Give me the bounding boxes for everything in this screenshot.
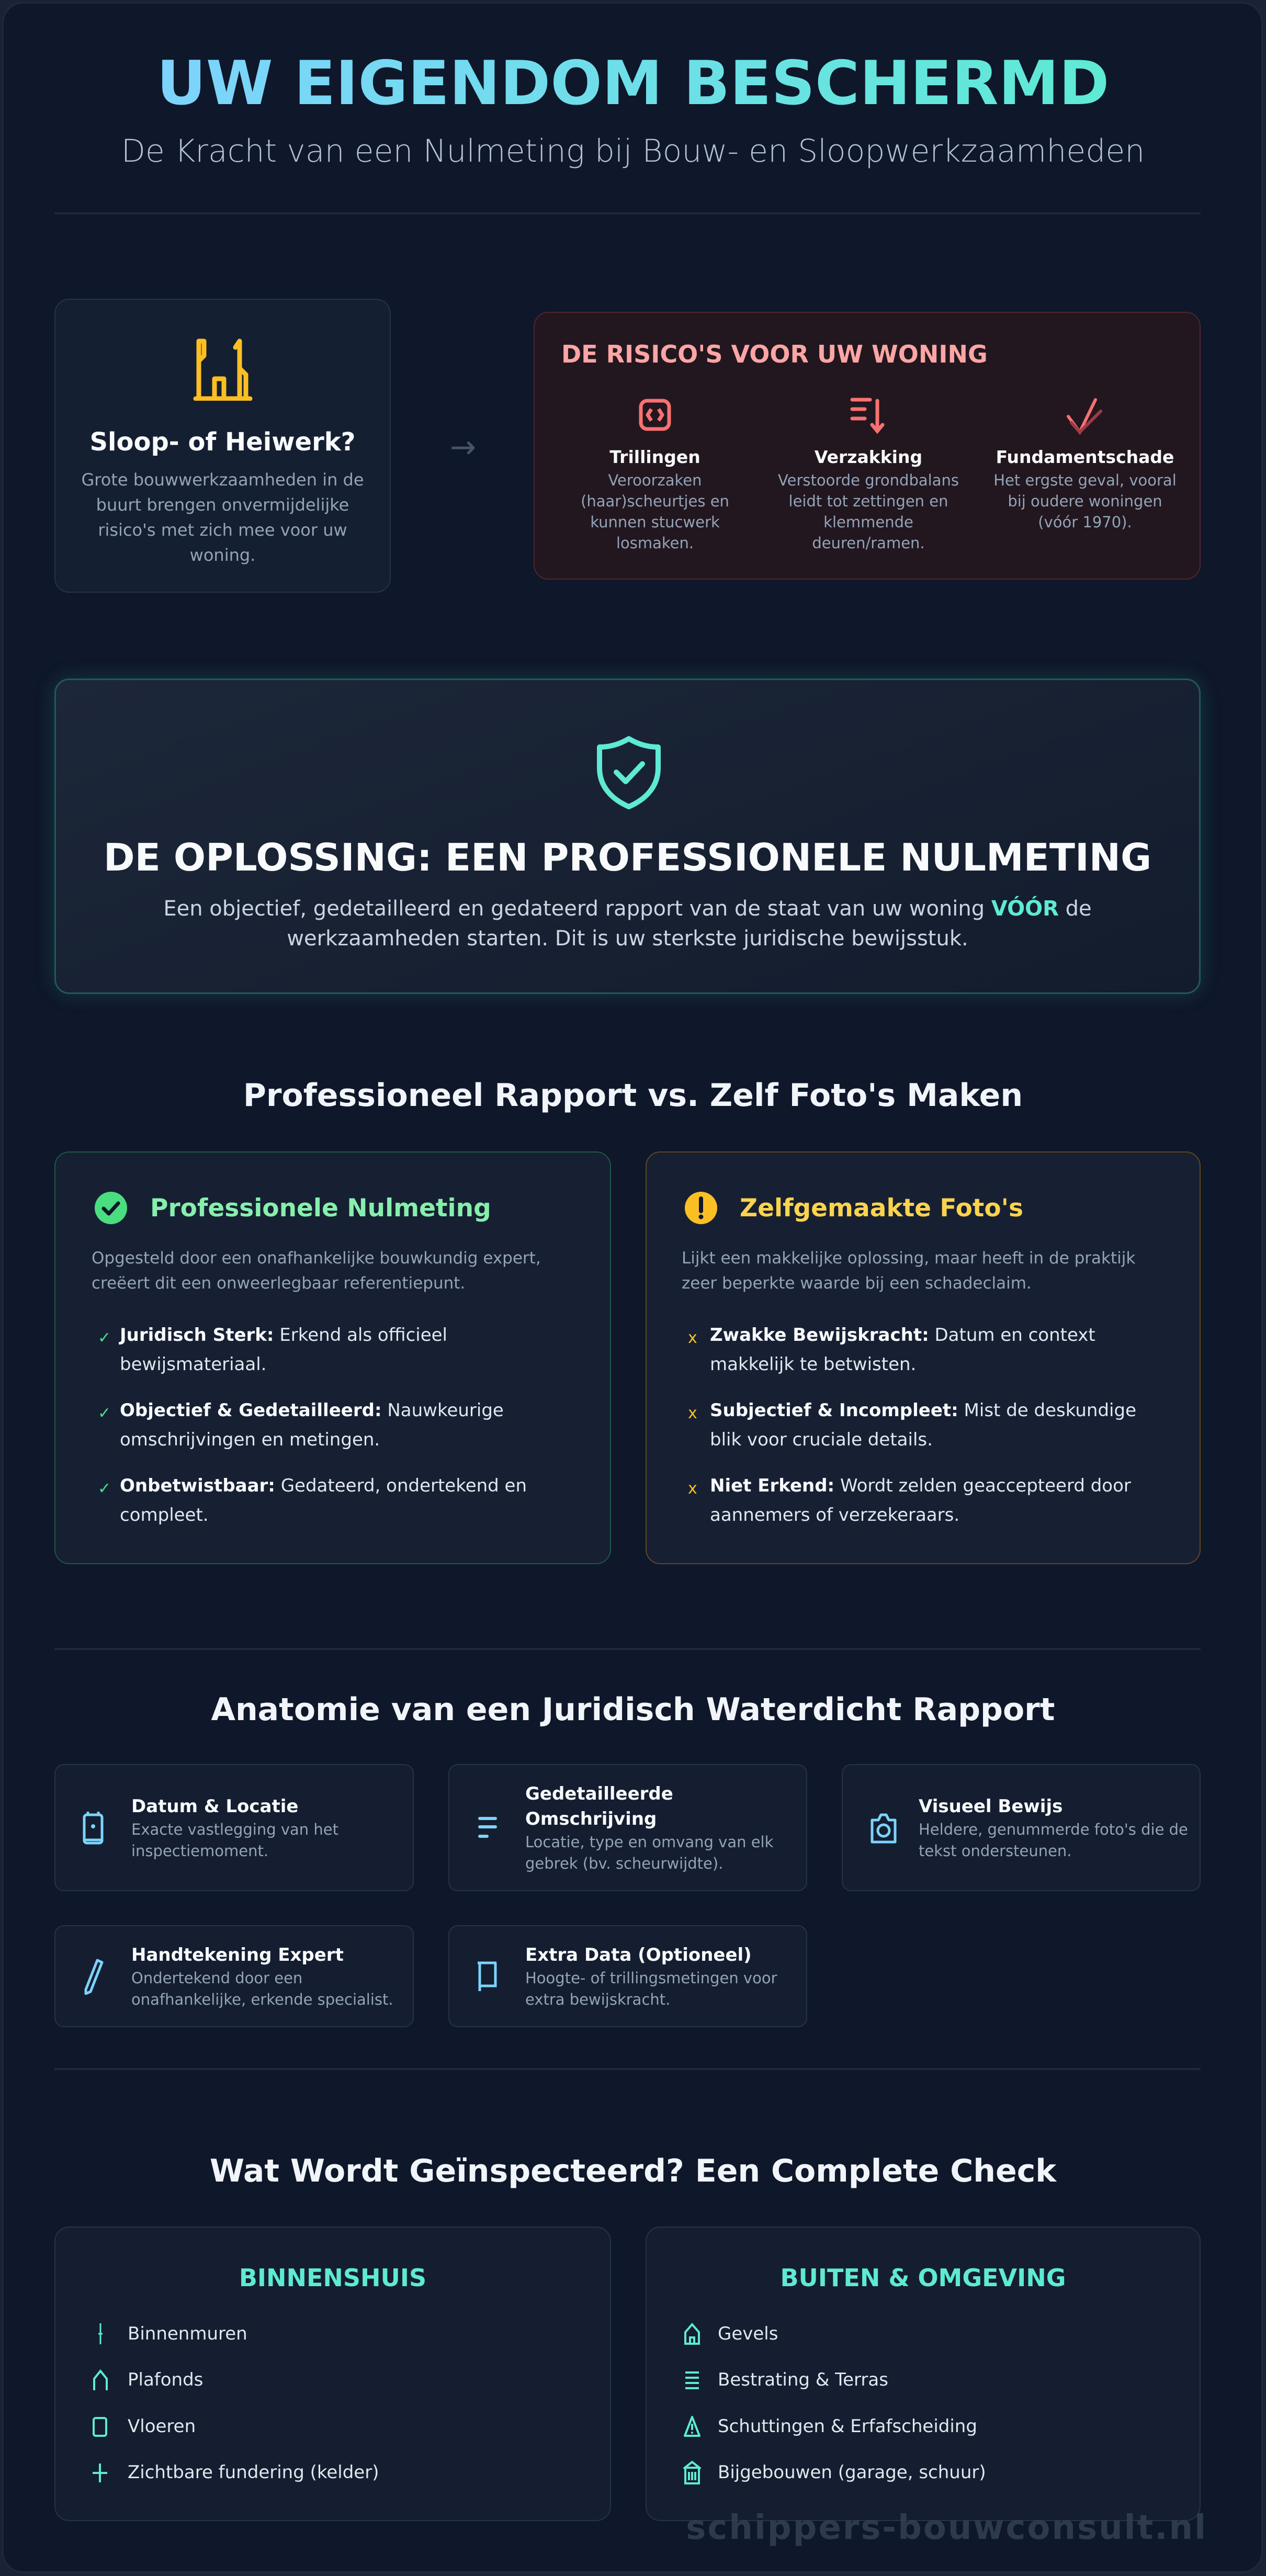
card: handtekening: Ondertekend door een [131, 1969, 302, 1987]
text: intro [92, 1249, 541, 1293]
risk: trillingen [581, 399, 729, 552]
card: extra data: Extra Data (Optioneel) [525, 1944, 752, 1965]
list: buiten: Gevels [718, 2323, 778, 2344]
bullet list: pro: ✓ [98, 1404, 111, 1422]
bullet list: contra: blik voor cruciale details. [710, 1429, 933, 1450]
list: binnenshuis: Binnenmuren [128, 2323, 247, 2344]
card: datum & locatie [54, 1764, 414, 1891]
bullet list: pro: Juridisch Sterk: Erkend als officieel [120, 1325, 447, 1346]
text: sloop description: Grote bouwwerkzaamheden in de [81, 470, 364, 490]
card: datum & locatie: Datum & Locatie [131, 1795, 298, 1816]
heading: zelf: Zelfgemaakte Foto's [740, 1194, 1023, 1223]
card: datum & locatie: inspectiemoment. [131, 1841, 268, 1859]
card: omschrijving: Omschrijving [525, 1808, 657, 1829]
risk: trillingen: kunnen stucwerk [590, 513, 720, 531]
card: handtekening [54, 1925, 414, 2027]
heading: professioneel: Professionele Nulmeting [150, 1194, 491, 1223]
card: omschrijving: gebrek (bv. scheurwijdte). [525, 1854, 723, 1872]
panel: binnenshuis [54, 2227, 611, 2521]
text: oplossing: Een objectief, gedetailleerd en gedateerd rapport van de staat van uw woning VÓÓR de [163, 897, 1092, 921]
card: extra data: Hoogte- of trillingsmetingen voor [525, 1969, 777, 1987]
risk: verzakking: deuren/ramen. [812, 534, 925, 552]
card: extra data [448, 1925, 807, 2027]
risk: verzakking: klemmende [823, 513, 913, 531]
risk: verzakking [778, 398, 959, 552]
text: intro: creëert dit een onweerlegbaar referentiepunt. [92, 1274, 465, 1293]
icon: check circle [95, 1192, 127, 1224]
risk: fundamentschade: Het ergste geval, vooral [993, 471, 1177, 489]
heading: sloop: Sloop- of Heiwerk? [89, 427, 356, 457]
list: binnenshuis: Zichtbare fundering (kelder) [128, 2462, 379, 2483]
list: binnenshuis [93, 2323, 379, 2483]
card: datum & locatie: Exacte vastlegging van het [131, 1821, 338, 1838]
subtitle: De Kracht van een Nulmeting bij Bouw- en Sloopwerkzaamheden [121, 133, 1145, 170]
text: sloop description: buurt brengen onvermijdelijke [96, 495, 349, 515]
card: omschrijving: Locatie, type en omvang van elk [525, 1833, 773, 1851]
icon: sinking [851, 398, 884, 434]
bullet list: contra: x [688, 1404, 697, 1422]
bullet list: pro: compleet. [120, 1505, 209, 1526]
risk: trillingen: losmaken. [616, 534, 694, 552]
list: buiten: Bestrating & Terras [718, 2369, 888, 2390]
bullet list: contra: Niet Erkend: Wordt zelden geaccepteerd door [710, 1475, 1131, 1496]
heading: oplossing: DE OPLOSSING: EEN PROFESSIONELE NULMETING [104, 835, 1151, 879]
panel: oplossing [54, 679, 1201, 994]
risk: fundamentschade: Fundamentschade [996, 447, 1174, 467]
icon: crane [194, 339, 252, 401]
text: sloop description: woning. [190, 545, 255, 565]
risk: verzakking: leidt tot zettingen en [789, 492, 948, 510]
card: visueel bewijs: Visueel Bewijs [919, 1795, 1062, 1816]
text: oplossing [163, 896, 1092, 951]
card: visueel bewijs: tekst ondersteunen. [919, 1841, 1072, 1859]
text: sloop description: risico's met zich mee voor uw [98, 520, 347, 540]
risk: verzakking: Verstoorde grondbalans [778, 471, 959, 489]
text: oplossing: werkzaamheden starten. Dit is uw sterkste juridische bewijsstuk. [287, 927, 968, 951]
bullet list: pro: Onbetwistbaar: Gedateerd, ondertekend en [120, 1475, 527, 1496]
card: omschrijving: Gedetailleerde [525, 1783, 673, 1804]
heading: anatomie: Anatomie van een Juridisch Waterdicht Rapport [211, 1691, 1055, 1728]
text: sloop description [81, 470, 364, 565]
bullet list: pro: ✓ [98, 1479, 111, 1498]
bullet list: pro: omschrijvingen en metingen. [120, 1429, 380, 1450]
text: intro: zeer beperkte waarde bij een schadeclaim. [682, 1274, 1032, 1293]
list: buiten [683, 2323, 986, 2484]
list: binnenshuis: Plafonds [128, 2369, 203, 2390]
panel: buiten & omgeving [646, 2227, 1201, 2521]
risk: fundamentschade: bij oudere woningen [1008, 492, 1162, 510]
icon: exclamation circle [685, 1192, 717, 1224]
heading: buiten: BUITEN & OMGEVING [780, 2264, 1066, 2292]
icon: data [478, 1962, 497, 1991]
bullet list: contra: Zwakke Bewijskracht: Datum en context [710, 1325, 1095, 1346]
icon: camera [871, 1813, 897, 1844]
risk: trillingen: Trillingen [609, 447, 700, 467]
card: visueel bewijs: Heldere, genummerde foto's die de [919, 1821, 1188, 1838]
list: buiten: Bijgebouwen (garage, schuur) [718, 2462, 986, 2483]
bullet list: contra: aannemers of verzekeraars. [710, 1505, 959, 1526]
bullet list: pro: bewijsmateriaal. [120, 1354, 266, 1375]
bullet list: contra: makkelijk te betwisten. [710, 1354, 916, 1375]
risk: trillingen: Veroorzaken [608, 471, 702, 489]
bullet list: contra: x [688, 1479, 697, 1498]
panel: professionele nulmeting [54, 1151, 611, 1564]
card: visueel bewijs [842, 1764, 1201, 1891]
heading: risico's: DE RISICO'S VOOR UW WONING [561, 340, 988, 368]
risk: verzakking: Verzakking [815, 447, 922, 467]
icon: crack [1067, 398, 1102, 434]
title: UW EIGENDOM BESCHERMD [157, 48, 1109, 119]
risk: fundamentschade: (vóór 1970). [1038, 513, 1132, 531]
list: binnenshuis: Vloeren [128, 2416, 196, 2437]
panel: zelfgemaakte foto's [646, 1151, 1201, 1564]
heading: binnenshuis: BINNENSHUIS [239, 2264, 426, 2292]
heading: inspectie: Wat Wordt Geïnspecteerd? Een Complete Check [210, 2153, 1056, 2189]
card: handtekening: Handtekening Expert [131, 1944, 344, 1965]
bullet list: contra [688, 1325, 1136, 1526]
text: intro: Opgesteld door een onafhankelijke bouwkundig expert, [92, 1249, 541, 1268]
icon: vibration [639, 399, 671, 431]
card: handtekening: onafhankelijke, erkende specialist. [131, 1990, 393, 2008]
bullet list: contra: Subjectief & Incompleet: Mist de deskundige [710, 1400, 1136, 1421]
bullet list: pro: ✓ [98, 1329, 111, 1347]
risk: fundamentschade [993, 398, 1177, 531]
card: omschrijving [448, 1764, 807, 1891]
arrow: → [450, 429, 476, 466]
text: intro [682, 1249, 1135, 1293]
footer: watermark: schippers-bouwconsult.nl [686, 2509, 1207, 2547]
heading: vergelijking: Professioneel Rapport vs. Zelf Foto's Maken [243, 1077, 1023, 1114]
bullet list: pro [98, 1325, 527, 1526]
text: intro: Lijkt een makkelijke oplossing, maar heeft in de praktijk [682, 1249, 1135, 1268]
card: extra data: extra bewijskracht. [525, 1990, 670, 2008]
icon: calendar [83, 1812, 104, 1845]
list: buiten: Schuttingen & Erfafscheiding [718, 2416, 977, 2437]
panel: sloop of heiwerk [54, 299, 391, 593]
panel: risico's [534, 312, 1201, 580]
icon: lines [478, 1817, 497, 1838]
bullet list: contra: x [688, 1329, 697, 1347]
icon: shield [597, 736, 661, 809]
icon: pen [85, 1959, 104, 1995]
bullet list: pro: Objectief & Gedetailleerd: Nauwkeurige [120, 1400, 504, 1421]
risk: trillingen: (haar)scheurtjes en [581, 492, 729, 510]
